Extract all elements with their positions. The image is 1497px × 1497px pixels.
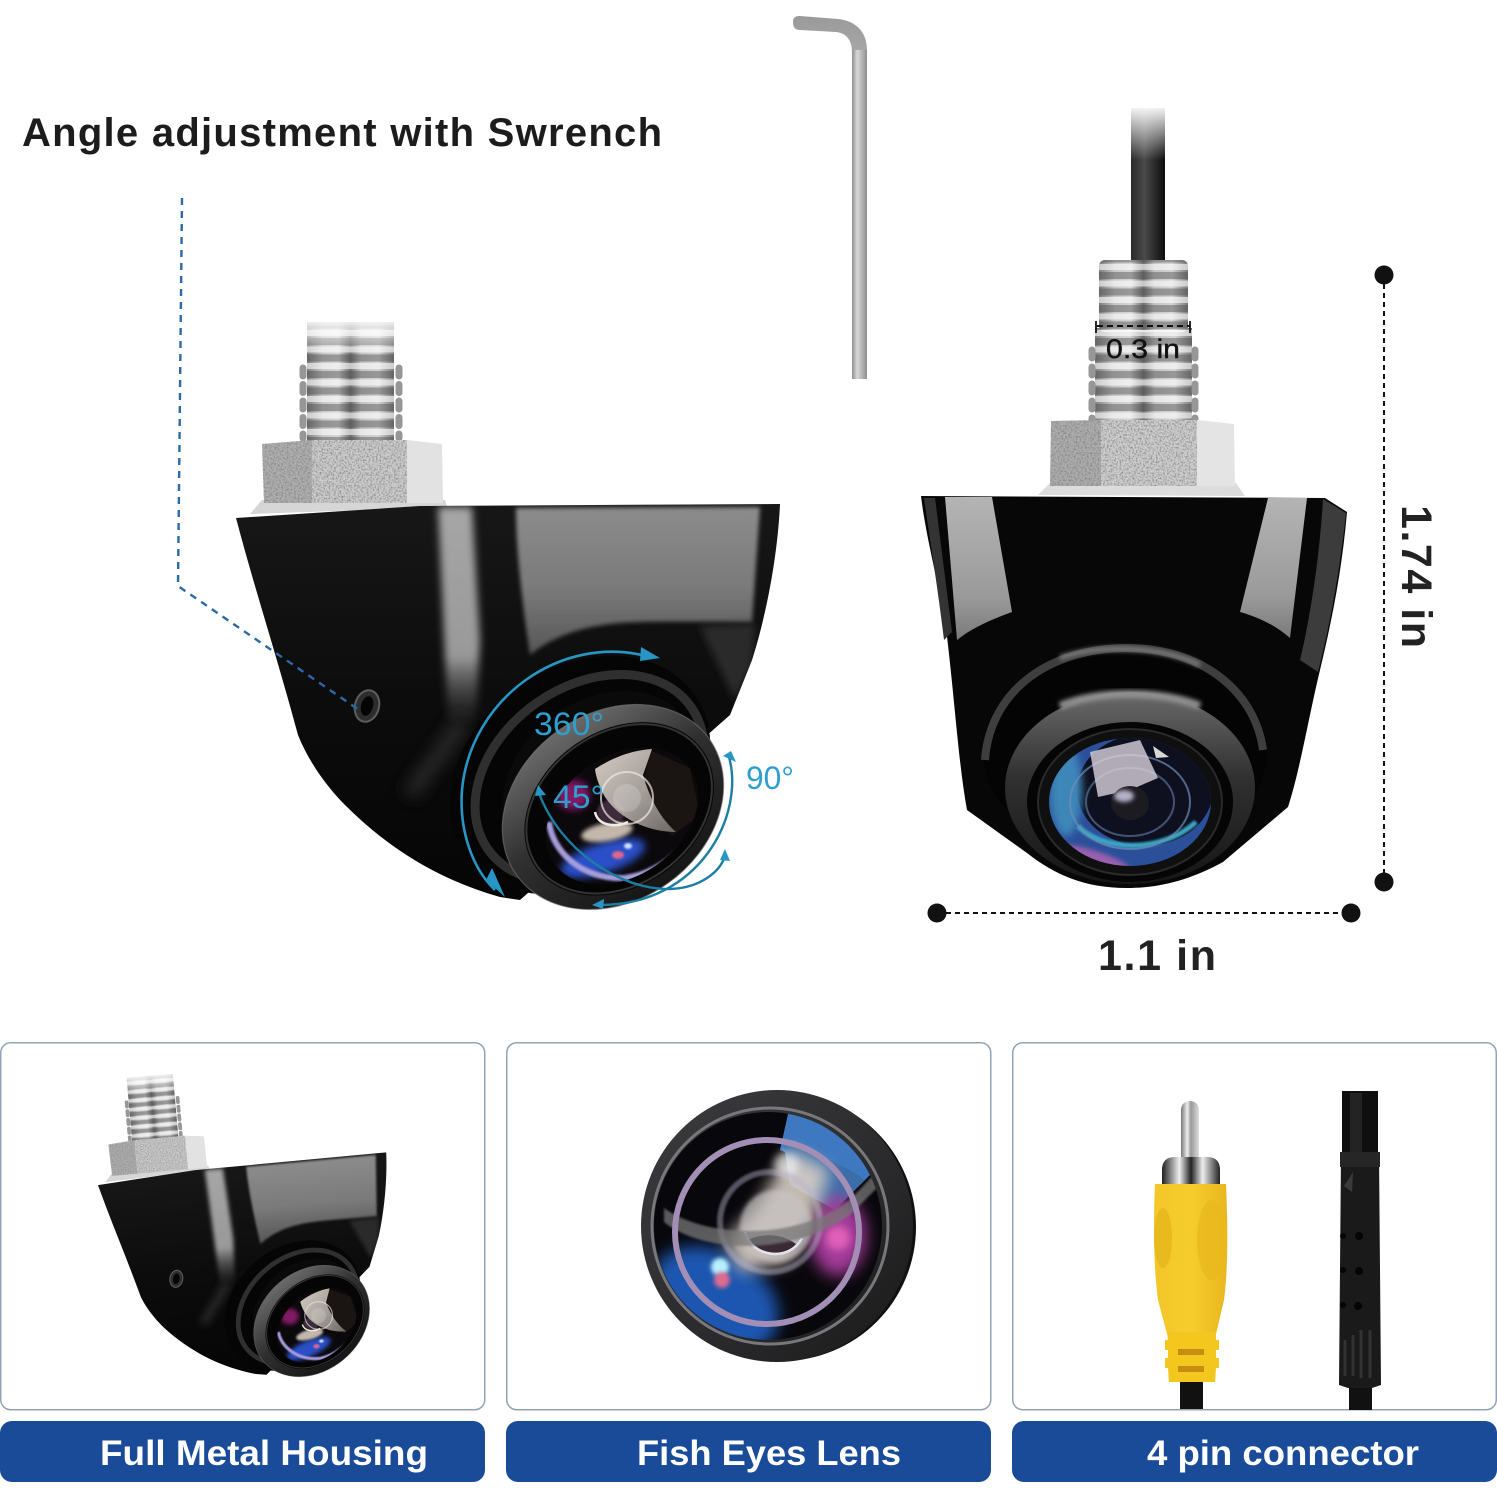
lens barrel	[983, 647, 1267, 857]
dimension: width 1.1 in: 1.1 in	[1098, 932, 1216, 980]
threaded bolt	[1092, 260, 1195, 422]
arrow: 45 tilt	[535, 785, 730, 889]
label bar: 4 pin connector: 4 pin connector	[1147, 1434, 1419, 1473]
icon: hex wrench	[793, 16, 867, 379]
arrow: 360 rotation	[462, 647, 660, 897]
panel: 4 pin connector	[1013, 1043, 1496, 1410]
nut	[1038, 420, 1245, 496]
label bar: full metal housing	[0, 1421, 485, 1482]
small camera photo	[89, 1054, 407, 1415]
label bar: fish eyes lens: Fish Eyes Lens	[637, 1434, 901, 1473]
dimension: height 1.74 in	[1374, 266, 1440, 892]
label: 90 degrees: 90°	[746, 760, 794, 796]
panel: full metal housing	[1, 1043, 485, 1415]
housing	[921, 496, 1347, 888]
lens outer ring	[1005, 692, 1255, 884]
right camera, front view	[921, 105, 1347, 888]
panel: fish eyes lens	[507, 1043, 991, 1410]
black 4 pin plug	[1339, 1091, 1381, 1410]
rotation arrows	[462, 647, 736, 909]
label bar: fish eyes lens	[506, 1421, 991, 1482]
dashed leader line to adjustment hole	[178, 198, 362, 712]
title: angle adjustment: Angle adjustment with Swrench	[22, 111, 662, 155]
dimension: width 1.1 in	[928, 904, 1360, 980]
dimension: thread width 0.3 in	[1096, 321, 1190, 364]
lens photo	[632, 1090, 916, 1376]
label: 360 degrees: 360°	[534, 706, 604, 742]
cable	[1131, 108, 1165, 268]
label: 45 degrees: 45°	[553, 779, 604, 815]
left camera, angled view	[236, 318, 780, 952]
dimension: height 1.74 in: 1.74 in	[1392, 505, 1440, 648]
label bar: full metal housing: Full Metal Housing	[100, 1434, 428, 1473]
yellow RCA plug	[1154, 1101, 1227, 1409]
arrow: 90 tilt	[592, 751, 736, 909]
lens glass	[1049, 738, 1211, 866]
label bar: 4 pin connector	[1012, 1421, 1497, 1482]
dimension: thread width 0.3 in: 0.3 in	[1106, 334, 1180, 364]
